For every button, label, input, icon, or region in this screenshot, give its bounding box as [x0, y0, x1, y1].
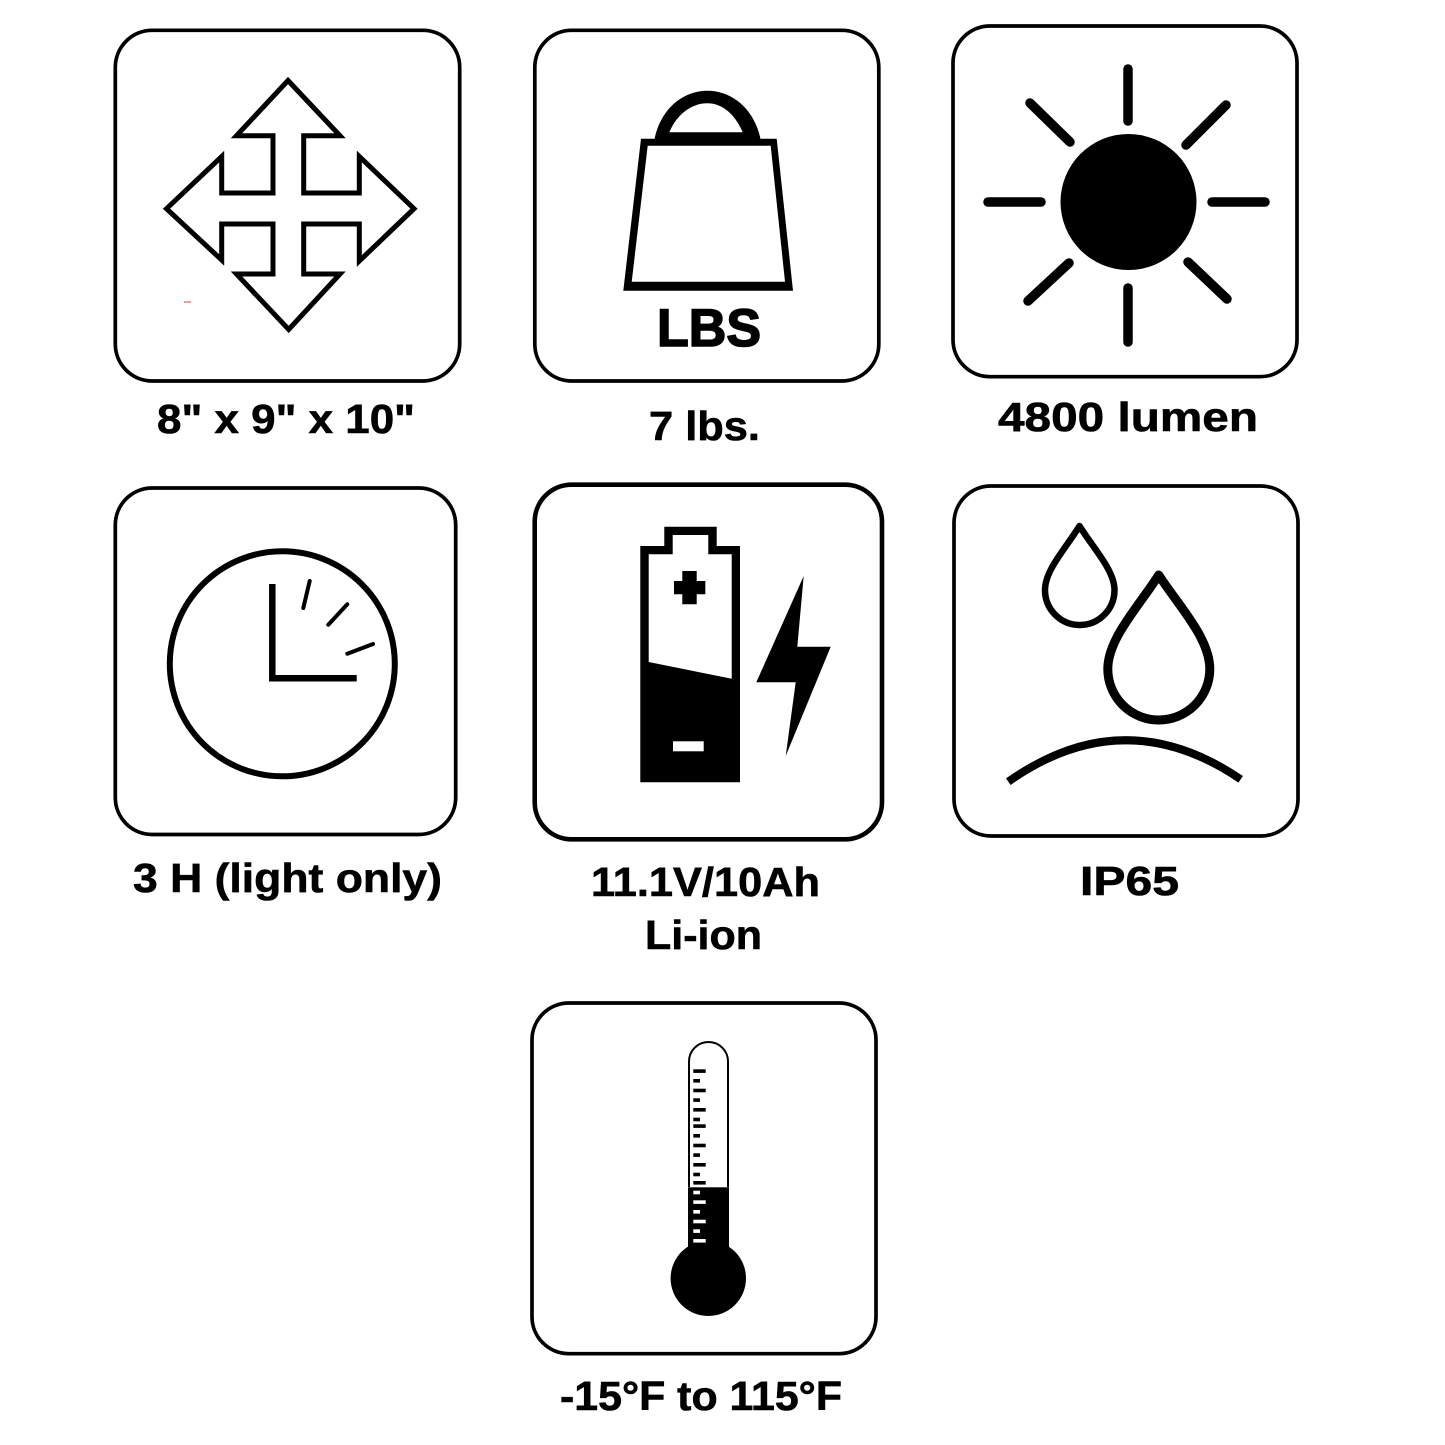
- icon: weight bag: [623, 91, 793, 291]
- icon text: LBS: LBS: [657, 299, 761, 358]
- label: runtime: 3 H (light only): [133, 855, 442, 901]
- icon: battery: [640, 527, 740, 782]
- label: brightness: 4800 lumen: [998, 394, 1258, 440]
- panel: water resistance: [954, 486, 1298, 904]
- label: weight: 7 lbs.: [649, 403, 760, 449]
- label: dimensions: 8" x 9" x 10": [157, 396, 415, 442]
- panel: runtime: [115, 488, 456, 901]
- label: temperature: -15°F to 115°F: [560, 1373, 842, 1419]
- icon: lightning bolt: [756, 576, 831, 756]
- label: battery: [591, 859, 820, 958]
- icon: four-way arrows: [166, 80, 414, 330]
- label: battery: Li-ion: [645, 912, 762, 958]
- panel: weight: [535, 30, 879, 449]
- label: water resistance: IP65: [1080, 858, 1179, 904]
- panel: battery: [535, 485, 882, 958]
- panel: temperature: [532, 1003, 876, 1419]
- label: battery: 11.1V/10Ah: [591, 859, 820, 905]
- icon: sun: [988, 69, 1265, 342]
- icon: thermometer: [671, 1042, 746, 1316]
- panel: dimensions: [115, 30, 460, 442]
- panel: brightness: [953, 26, 1297, 440]
- icon: water drops: [1008, 526, 1241, 782]
- icon: clock: [170, 551, 395, 776]
